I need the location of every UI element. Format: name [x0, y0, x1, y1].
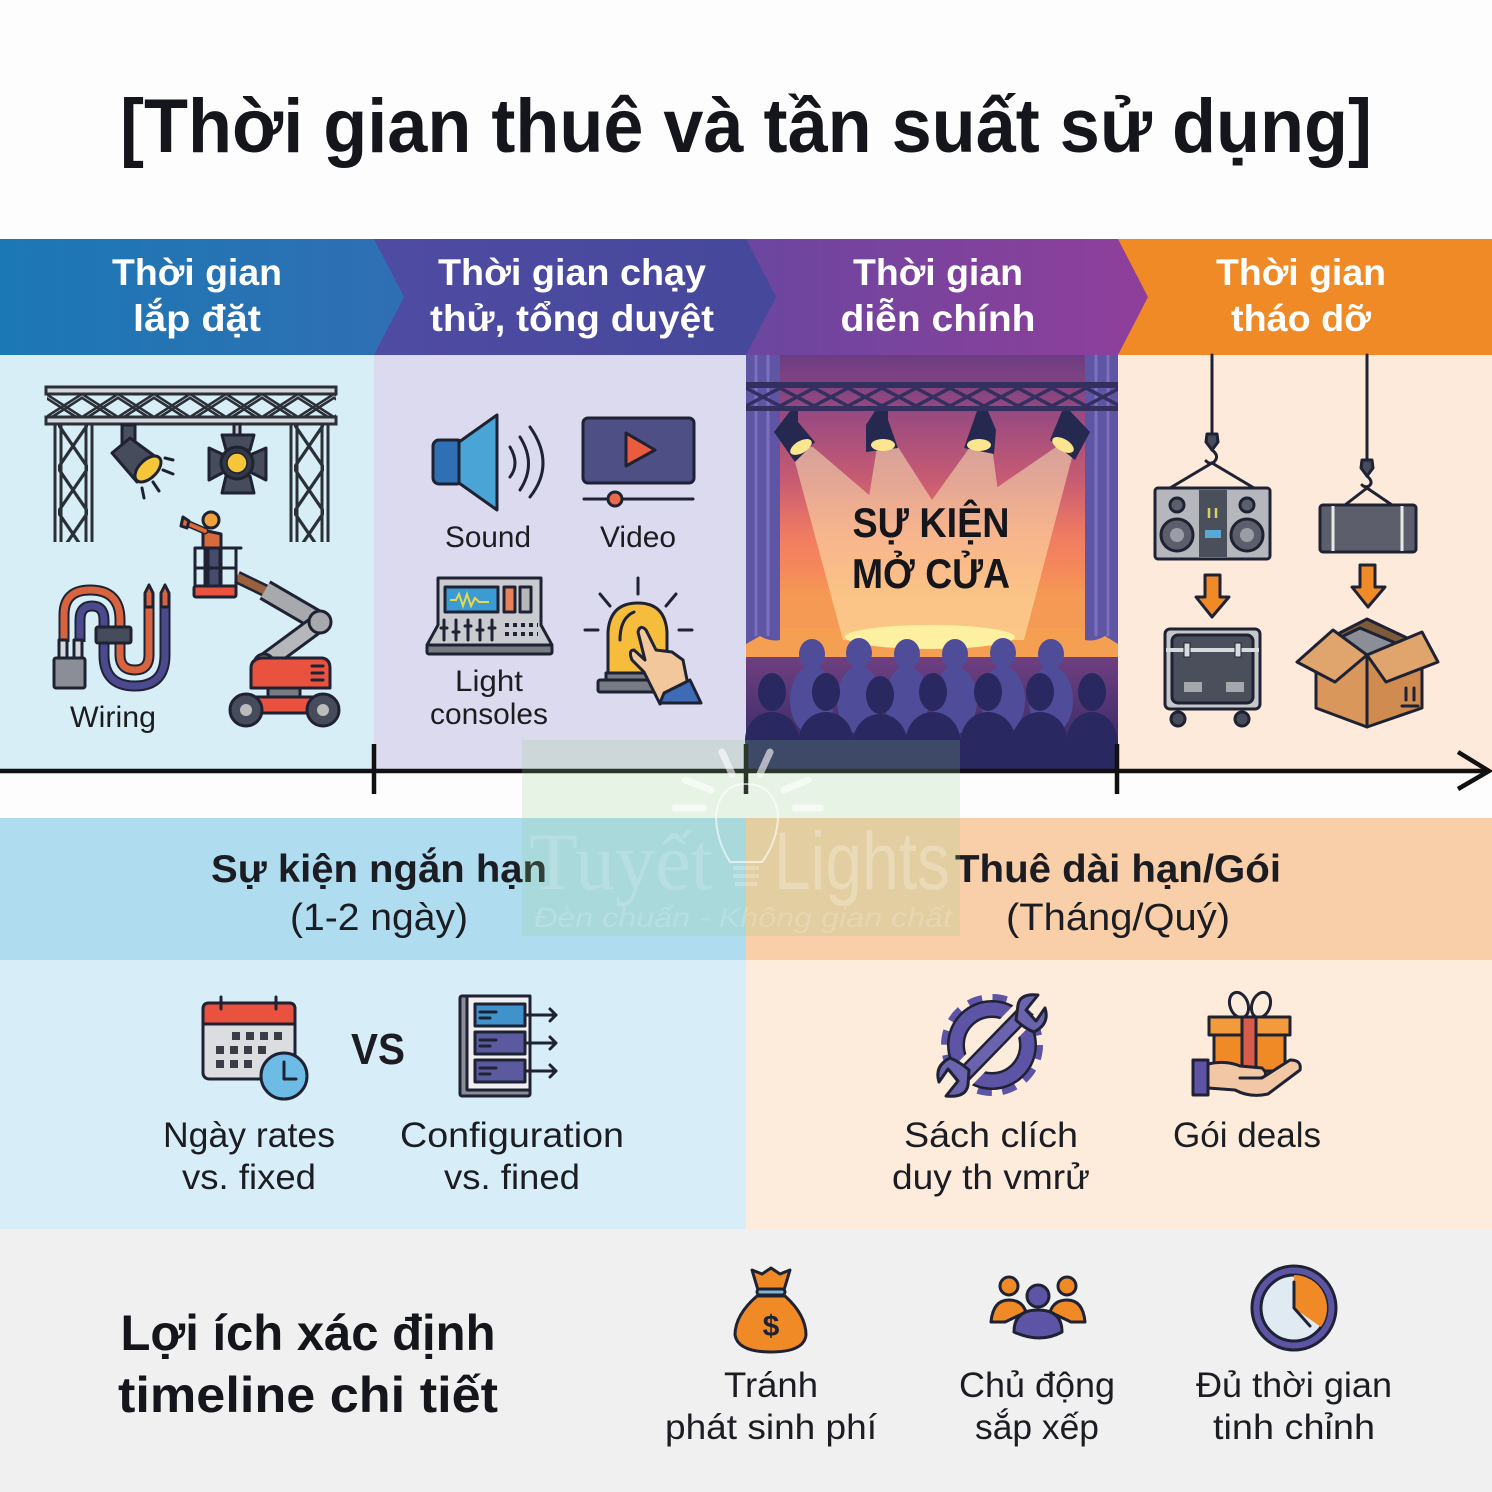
heading: benefits: Lợi ích xác định — [120, 1305, 496, 1361]
arrow: case to box — [1352, 565, 1385, 607]
header: tháo dỡ: Thời gian — [1216, 252, 1386, 293]
stage spot — [845, 625, 1015, 649]
header: diễn chính — [746, 239, 1148, 355]
label: light consoles — [430, 665, 548, 731]
label: ngày rates: Ngày rates — [163, 1116, 335, 1155]
icon: gift on hand — [1193, 990, 1300, 1095]
panel: stage event — [745, 355, 1118, 771]
header: diễn chính: Thời gian — [853, 252, 1023, 293]
heading: long term — [955, 848, 1281, 939]
watermark: Tuyết Lights: Lights — [774, 816, 950, 907]
panel: lắp đặt — [0, 355, 374, 771]
panel: lợi ích — [0, 1229, 1492, 1492]
watermark: Tuyết Lights: Đèn chuẩn - Không gian chất — [534, 902, 953, 933]
icon: flight case — [1165, 629, 1260, 726]
label: đủ thời gian tinh chỉnh: tinh chỉnh — [1213, 1408, 1375, 1447]
label: đủ thời gian tinh chỉnh: Đủ thời gian — [1196, 1366, 1392, 1405]
watermark: Tuyết Lights: Tuyết — [529, 816, 713, 907]
title: [Thời gian thuê và tần suất sử dụng] — [120, 84, 1372, 169]
heading: short term — [211, 847, 547, 939]
icon: boom lift with worker — [181, 512, 339, 726]
icon: money bag — [735, 1268, 806, 1352]
label: light consoles: Light — [455, 665, 524, 698]
curtains — [746, 355, 1118, 644]
icon: fresnel light — [209, 424, 266, 493]
header: tháo dỡ: tháo dỡ — [1231, 298, 1372, 339]
header: lắp đặt — [0, 239, 404, 355]
event text: SỰ KIỆN — [852, 498, 1010, 546]
icon: spotlight — [112, 425, 173, 498]
icon: people — [991, 1277, 1085, 1338]
label: đủ thời gian tinh chỉnh — [1196, 1366, 1392, 1447]
icon: cardboard box — [1297, 619, 1438, 727]
event text: MỞ CỬA — [852, 549, 1010, 597]
icon: speaker — [433, 415, 543, 510]
label: sách clích: Sách clích — [904, 1116, 1078, 1155]
panel: sự kiện ngắn hạn — [0, 818, 746, 1229]
label: configuration: vs. fined — [444, 1158, 580, 1197]
panel: thuê dài hạn — [746, 818, 1492, 1229]
icon: money bag: $ — [763, 1310, 780, 1343]
label: tránh phát sinh phí: Tránh — [724, 1366, 818, 1405]
label: video: Video — [600, 521, 676, 554]
panel: tháo dỡ — [1118, 355, 1492, 771]
audience back row — [790, 638, 1073, 734]
heading: benefits: timeline chi tiết — [118, 1367, 498, 1423]
header: lắp đặt: Thời gian — [112, 252, 282, 293]
label: chủ động sắp xếp: sắp xếp — [975, 1408, 1099, 1447]
icon: clock — [1252, 1266, 1336, 1350]
label: tránh phát sinh phí: phát sinh phí — [665, 1408, 877, 1447]
header: chạy thử: thử, tổng duyệt — [430, 298, 714, 339]
label: VS: VS — [351, 1025, 405, 1074]
header: chạy thử: Thời gian chạy — [438, 252, 706, 293]
icon: wiring cables — [54, 585, 169, 688]
label: tránh phát sinh phí — [665, 1366, 877, 1447]
label: ngày rates: vs. fixed — [182, 1158, 316, 1197]
header: chạy thử — [374, 239, 776, 355]
label: configuration — [400, 1116, 624, 1197]
audience front row — [745, 673, 1118, 770]
label: sách clích: duy th vmrử — [892, 1158, 1090, 1197]
label: sách clích — [892, 1116, 1090, 1197]
icon: calendar with clock — [203, 997, 307, 1099]
heading: short term: (1-2 ngày) — [290, 897, 468, 939]
label: chủ động sắp xếp: Chủ động — [959, 1366, 1115, 1405]
arrow: boombox to case — [1196, 575, 1229, 617]
panel: chạy thử — [374, 355, 746, 771]
icon: truss — [46, 387, 336, 542]
heading: long term: Thuê dài hạn/Gói — [955, 848, 1281, 891]
label: light consoles: consoles — [430, 698, 548, 731]
stage lights — [774, 411, 1090, 462]
icon: hanging case — [1320, 355, 1416, 552]
timeline axis — [0, 744, 1489, 794]
watermark: Tuyết Lights — [522, 740, 960, 936]
stage truss — [746, 382, 1118, 411]
heading: long term: (Tháng/Quý) — [1006, 897, 1230, 939]
heading: short term: Sự kiện ngắn hạn — [211, 847, 547, 891]
icon: alert button with hand — [585, 578, 701, 704]
label: chủ động sắp xếp — [959, 1366, 1115, 1447]
event text — [852, 498, 1010, 597]
icon: configuration — [460, 996, 556, 1096]
label: sound: Sound — [445, 521, 531, 554]
label: wiring: Wiring — [70, 701, 156, 734]
header: lắp đặt: lắp đặt — [133, 297, 261, 339]
header: diễn chính: diễn chính — [840, 298, 1036, 339]
icon: hanging boombox — [1155, 355, 1270, 559]
header: tháo dỡ — [1118, 239, 1492, 355]
icon: light console — [427, 578, 552, 654]
light beams — [791, 447, 1074, 640]
heading: benefits — [118, 1305, 498, 1423]
icon: video player — [583, 418, 694, 506]
label: ngày rates — [163, 1116, 335, 1197]
icon: gear and wrench — [938, 995, 1046, 1096]
label: configuration: Configuration — [400, 1116, 624, 1155]
label: gói deals: Gói deals — [1173, 1116, 1321, 1155]
timeline header chevrons — [0, 239, 1492, 355]
